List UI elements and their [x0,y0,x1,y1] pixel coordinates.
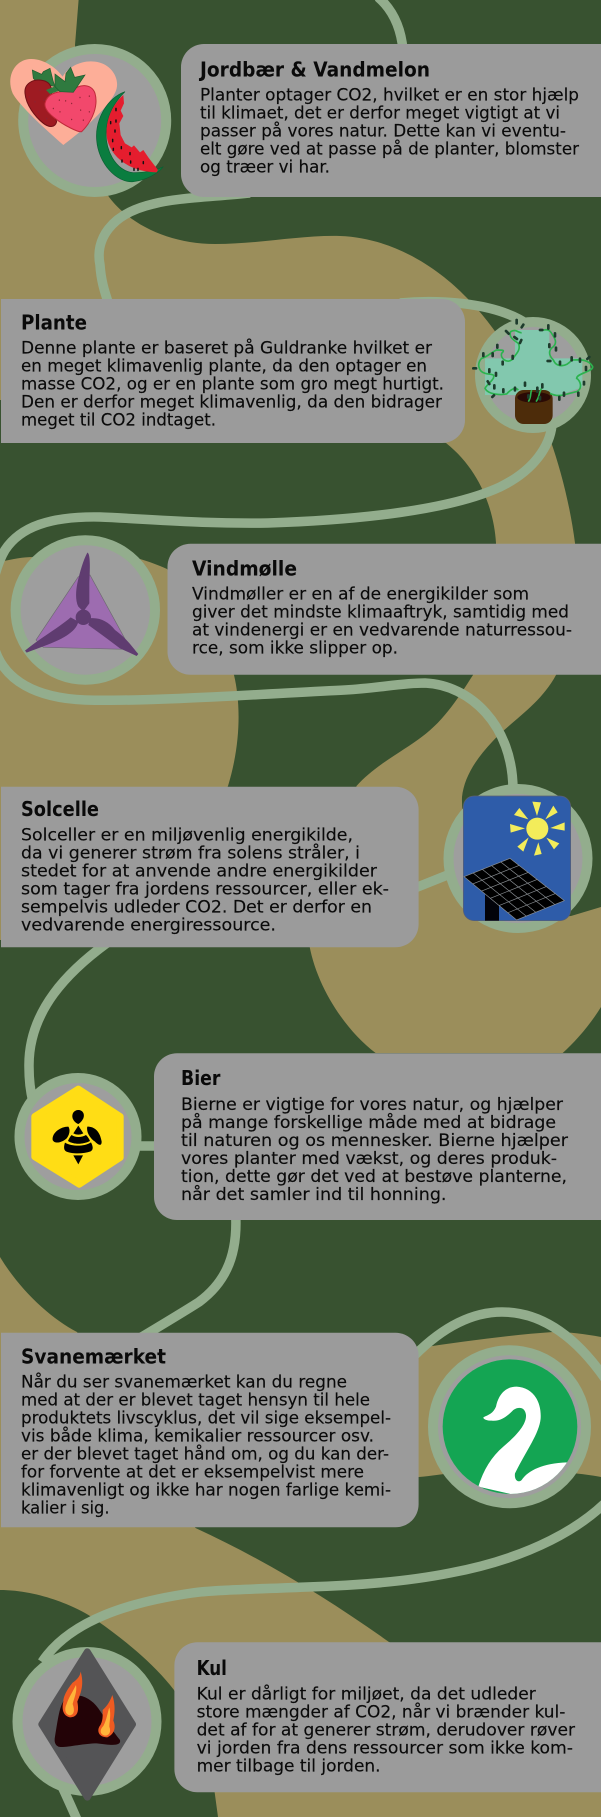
heading: Kul: Kul [197,1656,227,1680]
text block: Kul body [197,1683,575,1776]
text block: Plante body: meget til CO2 indtaget. [21,410,216,430]
circle: strawberry and watermelon [23,49,166,192]
icon: strawberries and watermelon [10,59,163,182]
text block: Solcelle body: stedet for at anvende andre energikilder [21,862,377,882]
circle: coal [18,1652,156,1791]
text block: Kul body: Kul er dårligt for miljøet, da det udleder [197,1683,536,1704]
circle: swan label [433,1350,586,1503]
text block: Jordbær & Vandmelon body: Planter optager CO2, hvilket er en stor hjælp [200,86,579,106]
icon: plant [473,320,593,424]
text block: Bier body: Bierne er vigtige for vores natur, og hjælper [181,1095,563,1115]
panel: Svanemærket [1,1333,419,1527]
text block: Kul body: mer tilbage til jorden. [197,1756,381,1776]
panel: Kul [174,1642,601,1792]
text block: Svanemærket body: vis både klima, kemikalier ressourcer osv. [21,1426,374,1447]
text block: Svanemærket body: for forvente at det er eksempelvist mere [21,1463,364,1483]
text block: Svanemærket body: klimavenligt og ikke har nogen farlige kemi- [21,1481,391,1501]
text block: Jordbær & Vandmelon body: passer på vores natur. Dette kan vi eventu- [200,121,566,142]
text block: Vindmølle body: Vindmøller er en af de energikilder som [192,584,529,604]
circle: wind turbine [16,540,155,680]
circle: plant [480,322,586,428]
text block: Kul body: store mængder af CO2, når vi brænder kul- [197,1701,565,1722]
text block: Bier body: til naturen og os mennesker. Bierne hjælper [181,1131,568,1151]
heading: Solcelle: Solcelle [21,797,99,821]
circle: bee [20,1078,136,1195]
text block: Bier body: vores planter med vækst, og deres produk- [181,1149,557,1169]
icon: wind turbine [25,553,138,656]
text block: Plante body [21,337,444,430]
text block: Jordbær & Vandmelon body [200,86,579,178]
text block: Jordbær & Vandmelon body: elt gøre ved at passe på de planter, blomster [200,139,579,160]
text block: Plante body: en meget klimavenlig plante, da den optager en [21,356,427,376]
circle: solar cell [448,789,588,928]
text block: Vindmølle body [192,584,572,658]
panel: Solcelle [1,787,419,947]
text block: Plante body: masse CO2, og er en plante som gro megt hurtigt. [21,374,444,394]
heading: Vindmølle: Vindmølle [192,556,297,580]
text block: Svanemærket body: produktets livscyklus, det vil sige eksempel- [21,1409,391,1429]
text block: Bier body: på mange forskellige måde med at bidrage [181,1112,556,1133]
panel: Jordbær & Vandmelon [181,44,601,197]
heading: Bier: Bier [181,1066,221,1090]
text block: Plante body: Denne plante er baseret på Guldranke hvilket er [21,337,432,358]
text block: Svanemærket body: Når du ser svanemærket kan du regne [21,1372,347,1393]
heading: Svanemærket: Svanemærket [21,1344,166,1368]
heading: Plante: Plante [21,310,87,334]
text block: Solcelle body: da vi generer strøm fra solens stråler, i [21,843,360,864]
text block: Solcelle body: sempelvis udleder CO2. Det er derfor en [21,898,372,918]
panel: Plante [1,299,465,443]
text block: Plante body: Den er derfor meget klimavenlig, da den bidrager [21,392,442,412]
icon: solar panel and sun [463,796,571,921]
panel: Bier [154,1053,601,1220]
heading: Jordbær & Vandmelon: Jordbær & Vandmelon [198,58,430,82]
text block: Solcelle body: som tager fra jordens ressourcer, eller ek- [21,880,389,900]
text block: Vindmølle body: giver det mindste klimaaftryk, samtidig med [192,602,569,622]
text block: Svanemærket body: med at der er blevet taget hensyn til hele [21,1391,370,1411]
text block: Bier body [181,1095,568,1205]
text block: Solcelle body: Solceller er en miljøvenlig energikilde, [21,826,353,846]
icon: burning coal [42,1652,133,1797]
text block: Jordbær & Vandmelon body: til klimaet, det er derfor meget vigtigt at vi [200,104,560,124]
text block: Bier body: når det samler ind til honning. [181,1184,446,1205]
text block: Solcelle body: vedvarende energiressource. [21,916,276,936]
text block: Svanemærket body: kalier i sig. [21,1499,110,1519]
text block: Kul body: vi jorden fra dens ressourcer som ikke kom- [197,1738,573,1758]
icon: swan label [443,1359,580,1500]
text block: Vindmølle body: rce, som ikke slipper op. [192,638,398,658]
text block: Vindmølle body: at vindenergi er en vedvarende naturressou- [192,620,572,640]
text block: Kul body: det af for at generer strøm, derudover røver [197,1720,575,1740]
text block: Svanemærket body: er der blevet taget hånd om, og du kan der- [21,1444,389,1465]
text block: Bier body: tion, dette gør det ved at bestøve planterne, [181,1167,567,1187]
panel: Vindmølle [168,544,601,675]
text block: Svanemærket body [21,1372,391,1519]
text block: Jordbær & Vandmelon body: og træer vi har. [200,158,330,178]
text block: Solcelle body [21,826,389,936]
icon: bee on yellow hexagon [35,1089,120,1184]
